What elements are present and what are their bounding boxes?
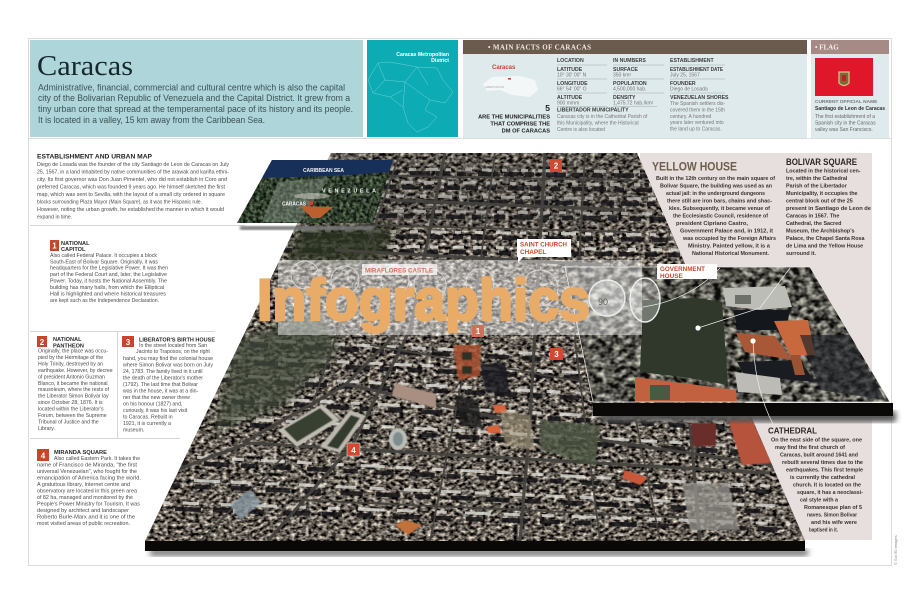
text: 1 national capitol: are kept such as the Independence Declaration. — [50, 298, 159, 304]
text: 1 national capitol: Also called Federal Palace. It occupies a block — [50, 253, 157, 259]
text: 3 liberator's birth house: where Simon Bolivar was born on July — [123, 362, 213, 368]
text: yellow house: Government Palace and, in 1912, it — [680, 228, 773, 234]
intro text: tiny urban core that spread at the temperamental pace of its history and its people. — [38, 104, 353, 114]
text: bolivar square — [786, 157, 871, 257]
inset thickness and shadow — [593, 403, 896, 422]
text: establishment and urban map: Diego de Losada was the founder of the city Santiago de Leon de Caracas on July — [37, 162, 229, 168]
flag caption: The first establishment of a — [815, 114, 875, 120]
column: establishment: ESTABLISHMENT — [670, 58, 715, 64]
text: 3 liberator's birth house: museum. — [123, 428, 144, 434]
text: 2 national pantheon: Forum, between the Supreme — [38, 413, 107, 419]
text: yellow house: kles. Subsequently, it became venue of — [669, 206, 770, 212]
text: cathedral: cal style with a — [800, 498, 839, 504]
label: Saint Church Chapel: SAINT CHURCH — [520, 242, 567, 248]
leader lines — [643, 268, 790, 424]
watermark: Infographics — [257, 268, 590, 333]
text: 4 miranda square: of 82 ha, managed and monitored by the — [37, 495, 133, 501]
label: Government House: GOVERNMENT — [660, 266, 705, 273]
locator map: Caracas — [492, 65, 516, 71]
column: location: 10° 30' 00" N — [557, 72, 587, 78]
text: establishment and urban map: city. Its first governor was Don Juan Pimentel, who did not establish in Coro and — [37, 177, 227, 183]
text: 3 liberator's birth house — [122, 336, 215, 434]
municipalities count: THAT COMPRISE THE — [490, 122, 550, 128]
map label — [396, 52, 449, 64]
leader dots — [695, 325, 756, 344]
text: 4 miranda square: universal Venezuelan", who fought for the — [37, 469, 137, 475]
text: 2 national pantheon: of president Antonio Guzman — [38, 374, 105, 380]
text: yellow house: Built in the 12th century on the main square of — [656, 176, 775, 182]
text: cathedral: baptised in it. — [809, 528, 838, 534]
text: 4 miranda square: MIRANDA SQUARE — [54, 450, 107, 456]
text: 3 liberator's birth house: ner that the new owner threw — [123, 395, 190, 401]
label: Miraflores Castle: MIRAFLORES CASTLE — [365, 268, 433, 274]
text: 3 liberator's birth house: LIBERATOR'S BIRTH HOUSE — [139, 338, 215, 344]
column: in numbers: IN NUMBERS — [613, 58, 646, 64]
text: bolivar square: central block out of the 25 — [786, 198, 853, 204]
text: establishment and urban map: map, which was sent to Sevilla, with the layout of a small city ordered in square — [37, 192, 225, 198]
text: 2 national pantheon: PANTHEON — [53, 344, 84, 350]
column: in numbers: 1,475.72 hab./km² — [613, 100, 654, 106]
main aerial map — [140, 150, 810, 556]
cathedral roofs — [736, 333, 792, 360]
text: cathedral: square, it has a neoclassi- — [797, 490, 863, 496]
number marker 3: 3 — [554, 350, 559, 359]
column: location: LOCATION — [557, 58, 584, 64]
label: Saint Church Chapel — [517, 239, 571, 263]
magnified inset: Bolivar Square — [560, 265, 896, 422]
panel: title — [30, 40, 363, 137]
column: establishment: FOUNDER — [670, 81, 696, 87]
text: 2 national pantheon: mausoleum, where the rests of — [38, 387, 109, 393]
column: establishment: July 25, 1567 — [670, 72, 700, 78]
text: 3 liberator's birth house: the death of the Liberator's mother — [123, 376, 203, 382]
text: 3 liberator's birth house: In the street located from San — [139, 343, 207, 349]
small map labels: CARACAS — [282, 202, 307, 208]
text: bolivar square: BOLIVAR SQUARE — [786, 157, 857, 167]
lower buildings — [735, 372, 782, 395]
number badge 2: 2 — [40, 338, 45, 347]
text: yellow house: actual jail: in the underground dungeons — [666, 191, 765, 197]
text: 4 miranda square: most visited areas of public recreation. — [37, 521, 130, 527]
column: establishment: covered them in the 15th — [670, 108, 725, 114]
text: 1 national capitol: Power. Today, it hosts the National Assembly. The — [50, 278, 167, 284]
flag caption: Santiago de Leon de Caracas — [815, 106, 885, 112]
column: location: ALTITUDE — [557, 95, 583, 101]
Libertador municipality note: Centre is also located — [557, 127, 605, 133]
column: in numbers: SURFACE — [613, 67, 638, 73]
text: 2 national pantheon: pied by the Hermitage of the — [38, 355, 103, 361]
inset outline — [565, 267, 890, 402]
tree canopy — [640, 298, 728, 385]
label: Miraflores Castle — [362, 264, 437, 275]
column: location: 900 m/nm — [557, 100, 579, 106]
column: establishment: The Spanish settlers dis- — [670, 101, 725, 107]
text: 3 liberator's birth house: 1921, it is currently a — [123, 421, 171, 427]
text: cathedral — [768, 426, 863, 534]
text: cathedral: church. It is located on the — [793, 482, 861, 488]
text: bolivar square: surround it. — [786, 251, 816, 257]
text: cathedral: earthquakes. This first temple — [786, 468, 863, 474]
text: yellow house: the Ecclesiastic Council, residence of — [673, 214, 768, 220]
text: 1 national capitol: NATIONAL — [61, 241, 90, 247]
municipalities count — [478, 103, 550, 134]
text: bolivar square: Museum, the Archbishop's — [786, 228, 854, 234]
text: 1 national capitol: part of the Federal Court and, later, the Legislative — [50, 272, 167, 278]
image credit: © Sol 90 Images — [893, 535, 898, 565]
facts header — [463, 40, 807, 54]
map label: District — [431, 58, 449, 64]
plazas and notable roofs — [230, 345, 772, 535]
column: establishment: century. A hundred — [670, 114, 712, 120]
municipalities count: ARE THE MUNICIPALITIES — [478, 114, 550, 120]
watermark: 90 — [598, 297, 608, 307]
small location map — [237, 160, 393, 230]
text: 4 miranda square: Roberto Burle-Marx and it is one of the — [37, 514, 135, 520]
text: yellow house: National Historical Monument. — [692, 251, 769, 257]
Libertador municipality note: LIBERTADOR MUNICIPALITY — [557, 108, 629, 114]
text: bolivar square: Palace, the Chapel Santa Rosa — [786, 236, 865, 242]
text: 2 national pantheon: Originally, the place was occu- — [38, 348, 108, 354]
text: 2 national pantheon: earthquake. However, by decree — [38, 368, 113, 374]
text: cathedral: Caracas, built around 1641 and — [780, 452, 858, 458]
Libertador municipality note: Caracas city is in the Cathedral Parish of — [557, 114, 648, 120]
flag header: • FLAG — [815, 44, 839, 52]
text: 2 national pantheon: located within the Liberator's — [38, 406, 104, 412]
column: establishment — [670, 58, 729, 132]
text: yellow house: YELLOW HOUSE — [652, 162, 737, 174]
map thickness and shadow — [145, 541, 808, 556]
text: 1 national capitol: South-East of Bolivar Square. Originally, it was — [50, 260, 158, 266]
text: establishment and urban map: 25, 1567, in a land inhabited by native communities of the arawak and kariña ethni- — [37, 170, 229, 176]
text: 3 liberator's birth house: curiously, it was his last visit — [123, 408, 188, 414]
text: bolivar square: de Lima and the Yellow House — [786, 244, 863, 250]
text: cathedral: rebuilt several times due to the — [782, 460, 863, 466]
side panel: squares and buildings background — [640, 153, 872, 540]
map label: Caracas Metropolitan — [396, 52, 449, 58]
heading: Caracas: Caracas — [37, 51, 133, 82]
text: 3 liberator's birth house: 24, 1783. The family lived in it until — [123, 369, 202, 375]
text: bolivar square: Parish of the Libertador — [786, 184, 848, 190]
text: cathedral: On the east side of the square, one — [771, 438, 862, 444]
text: 1 national capitol: CAPITOL — [61, 247, 86, 253]
text: yellow house: Bolivar Square, the building was used as an — [660, 184, 772, 190]
text: cathedral: may find the first church of — [775, 445, 845, 451]
column: in numbers: 350 km² — [613, 72, 631, 78]
column: location: LONGITUDE — [557, 81, 588, 87]
text: 3 liberator's birth house: Jacinto to Traposos, on the right — [136, 349, 210, 355]
label: Government House: HOUSE — [660, 273, 683, 280]
text: 4 miranda square: A gratuitous library, Internet centre and — [37, 482, 130, 488]
text: bolivar square: Caracas in 1567. The — [786, 214, 839, 220]
text: 2 national pantheon: Tribunal of Justice and the — [38, 420, 99, 426]
text: establishment and urban map: expand in time. — [37, 214, 72, 220]
building rows: bright roofs — [150, 168, 790, 524]
text: 3 liberator's birth house: hand, you may find the colonial house — [123, 356, 213, 362]
number marker 1: 1 — [476, 327, 481, 336]
municipalities count: 5 — [545, 103, 550, 113]
text: yellow house — [652, 162, 776, 257]
text: yellow house: there still are iron bars, chains and shac- — [667, 198, 772, 204]
text: 4 miranda square: observatory are located in this green area — [37, 488, 137, 494]
text: 2 national pantheon: Blanco, it became the national — [38, 381, 108, 387]
number marker 4 — [347, 443, 360, 456]
small map labels: CARIBBEAN SEA — [303, 168, 344, 174]
roads — [150, 153, 805, 541]
white buildings — [723, 286, 792, 310]
text: yellow house: was occupied by the Foreign Affairs — [682, 236, 776, 242]
small map labels — [282, 168, 376, 208]
number marker 4: 4 — [351, 446, 356, 455]
column: establishment: ESTABLISHMENT DATE — [670, 67, 723, 73]
text: cathedral: CATHEDRAL — [768, 426, 817, 436]
icon: red flag with emblem — [815, 58, 873, 96]
text: bolivar square: Cathedral, the Sacred — [786, 221, 841, 227]
flag caption — [815, 99, 885, 133]
text: bolivar square: present in Santiago de Leon de — [786, 206, 871, 212]
Libertador municipality note: this Municipality, where the Historical — [557, 120, 639, 126]
text: 4 miranda square: Also called Eastern Park. It takes the — [54, 456, 140, 462]
text: 2 national pantheon: NATIONAL — [53, 337, 82, 343]
label: Saint Church Chapel: CHAPEL — [520, 249, 546, 256]
building rows: dark shadows — [150, 172, 790, 530]
intro text: Administrative, financial, commercial and cultural centre which is also the capital — [38, 82, 345, 92]
intro text — [38, 82, 353, 125]
panel: flag — [811, 40, 889, 138]
label: Government House — [657, 264, 717, 280]
number marker 3 — [550, 348, 563, 360]
column: in numbers — [613, 58, 664, 106]
text: 2 national pantheon: Library. — [38, 426, 55, 432]
text: establishment and urban map — [37, 154, 229, 220]
locator map — [483, 65, 538, 97]
panel: main facts — [463, 40, 807, 138]
text: 1 national capitol — [50, 240, 168, 304]
Libertador municipality note — [557, 108, 648, 133]
column: establishment: Diego de Losada — [670, 86, 708, 92]
column: establishment: VENEZUELAN SHORES — [670, 95, 729, 101]
text: yellow house: Ministry. Painted yellow, it is a — [688, 244, 771, 250]
text: bolivar square: Municipality, it occupies the — [786, 191, 858, 197]
panel: metropolitan district map — [367, 40, 458, 137]
text: establishment and urban map: preferred Caracas, which was founded 9 years ago. He himself sketched the first — [37, 184, 226, 190]
column: in numbers: POPULATION — [613, 81, 647, 87]
flag caption: CURRENT OFFICIAL NAME — [815, 99, 878, 105]
text: 3 liberator's birth house: (1792). The last time that Bolivar — [123, 382, 198, 388]
number badge 1: 1 — [52, 242, 57, 250]
text: cathedral: and his wife were — [811, 520, 857, 526]
text: cathedral: Romanesque plan of 5 — [804, 505, 862, 511]
small map labels: VENEZUELA — [322, 188, 376, 194]
text: 2 national pantheon: since October 28, 1876. It is — [38, 400, 103, 406]
text: cathedral: is currently the cathedral — [790, 475, 855, 481]
text: 2 national pantheon: Holy Trinity, destroyed by an — [38, 362, 103, 368]
column: in numbers: DENSITY — [613, 95, 636, 101]
dark shadows — [733, 310, 790, 330]
text: establishment and urban map: blocks surrounding Plaza Mayor (Main Square), as it was the Hispanic rule. — [37, 200, 202, 206]
intro text: city of the Bolivarian Republic of Venezuela and the Capital District. It grew from a — [38, 93, 351, 103]
number badge 3: 3 — [126, 338, 131, 347]
text: establishment and urban map: ESTABLISHMENT AND URBAN MAP — [37, 154, 153, 160]
text: 4 miranda square: designed by architect and landscaper — [37, 508, 129, 514]
facts header: • MAIN FACTS OF CARACAS — [488, 44, 591, 52]
text: 4 miranda square — [37, 449, 141, 527]
flag caption: valley was San Francisco. — [815, 127, 873, 133]
dividers — [30, 226, 245, 438]
number badge 4: 4 — [41, 452, 46, 460]
number marker 1 — [472, 325, 484, 337]
text: bolivar square: Located in the historical cen- — [786, 168, 861, 174]
column: establishment: years later ventured into — [670, 120, 724, 126]
text: cathedral: naves. Simon Bolivar — [807, 512, 858, 518]
text: 4 miranda square: name of Francisco de Miranda, "the first — [37, 462, 138, 468]
district tones — [215, 155, 650, 430]
municipalities count: DM OF CARACAS — [502, 128, 550, 134]
text: 2 national pantheon: the Liberator Simon Bolivar lay — [38, 394, 109, 400]
text: 1 national capitol: Hall is highlighted and where historical treasures — [50, 292, 166, 298]
text: 4 miranda square: emancipation of America facing the world. — [37, 476, 141, 482]
text: 2 national pantheon — [37, 336, 113, 432]
text: yellow house: president Cipriano Castro, — [676, 221, 749, 227]
column: in numbers: 4,500,000 hab. — [613, 86, 646, 92]
Venezuela outline — [368, 62, 453, 132]
intro text: It is located in a valley, 15 km away from the Caribbean Sea. — [38, 115, 265, 125]
column: location — [557, 58, 607, 106]
text: 1 national capitol: headquarters for the Legislative Power. It was then — [50, 266, 168, 272]
text: 3 liberator's birth house: on his honour (1827) and, — [123, 402, 182, 408]
column: location: 66° 54' 00" O — [557, 86, 587, 92]
text: 4 miranda square: People's Power Ministry for Tourism. It was — [37, 502, 140, 508]
text: 1 national capitol: building has many halls, from which the Elliptical — [50, 285, 164, 291]
number marker 2 — [550, 159, 562, 172]
number marker 2: 2 — [554, 162, 559, 170]
text: 3 liberator's birth house: to Caracas. Rebuilt in — [123, 414, 173, 420]
text: bolivar square: tre, within the Cathedral — [786, 176, 848, 182]
flag caption: Spanish city in the Caracas — [815, 120, 876, 126]
text: 3 liberator's birth house: was in the house, it was at a din- — [123, 388, 199, 394]
column: location: LATITUDE — [557, 67, 583, 73]
locator map: LIBERTADOR — [485, 85, 505, 89]
text: establishment and urban map: However, noting the urban growth, he established the manner in which it would — [37, 207, 224, 213]
aerial surface — [140, 150, 810, 545]
column: establishment: the land up to Caracas. — [670, 126, 722, 132]
